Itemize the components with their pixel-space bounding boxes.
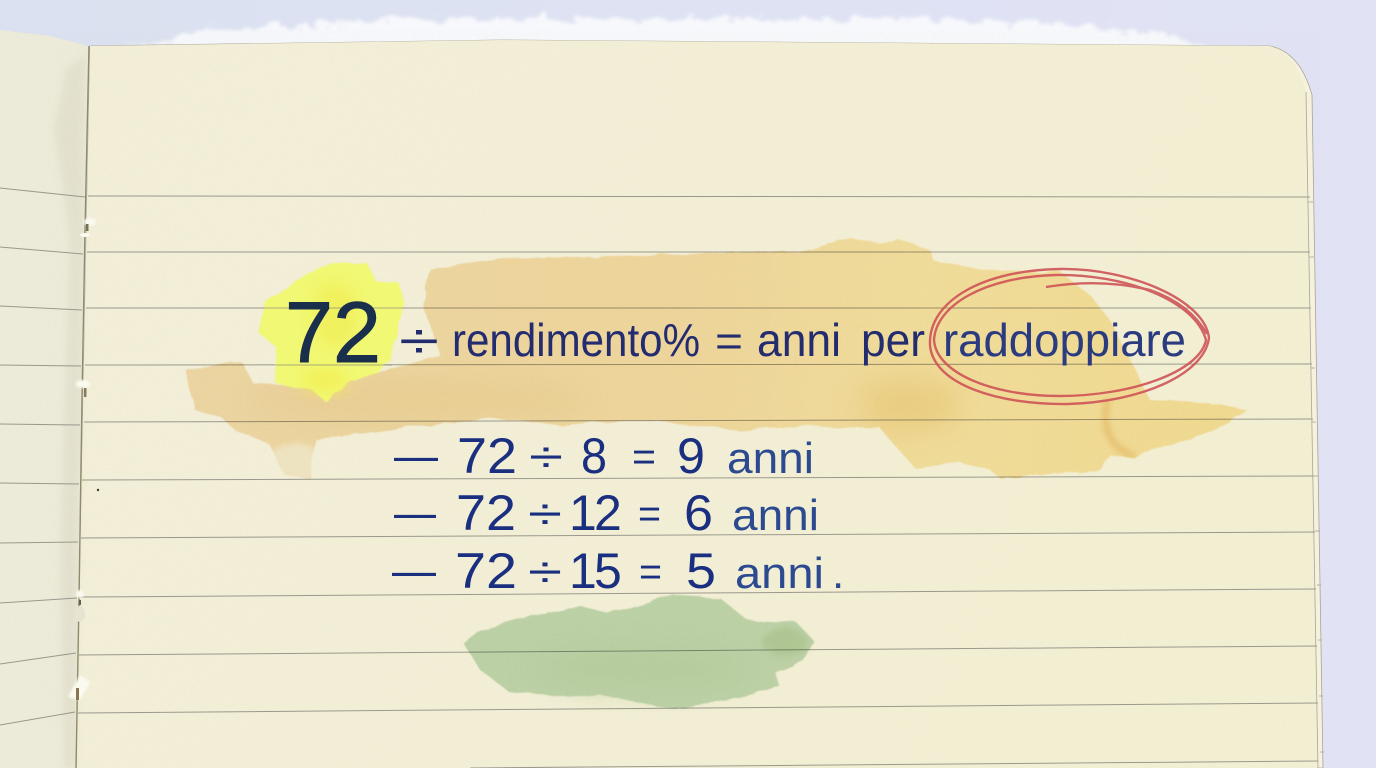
- watercolor: orange wash: [186, 238, 1245, 482]
- division sign: ÷: [399, 313, 439, 369]
- example: 72 / 15: =: [639, 550, 662, 594]
- page edge ticks: [1306, 92, 1324, 768]
- example: 72 / 8: 9: [677, 428, 705, 484]
- example: 72 / 12: [394, 485, 819, 541]
- rule lines: left page: [0, 188, 85, 725]
- spine fold: [76, 46, 89, 768]
- word: rendimento%: rendimento%: [452, 314, 700, 366]
- glare on desk: [130, 18, 1215, 50]
- example: 72 / 15: .: [832, 549, 844, 598]
- rule lines: right page: [78, 196, 1318, 768]
- example: 72 / 15: 72: [455, 543, 517, 599]
- example: 72 / 15: [392, 543, 844, 599]
- example: 72 / 8: 8: [581, 428, 607, 484]
- example: 72 / 15: anni: [735, 549, 824, 598]
- red circle around raddoppiare: [930, 269, 1209, 404]
- example: 72 / 15: ÷: [528, 548, 562, 597]
- word: per: per: [861, 314, 925, 366]
- ink speck: [97, 489, 99, 491]
- stitch: fourth: [68, 675, 90, 700]
- example: 72 / 8: 72: [457, 428, 517, 484]
- number 72: 72: [285, 285, 381, 381]
- example: 72 / 12: anni: [732, 491, 819, 540]
- example: 72 / 12: 72: [456, 485, 516, 541]
- example: 72 / 12: ÷: [528, 490, 562, 539]
- example: 72 / 12: =: [638, 492, 661, 536]
- example: 72 / 12: 12: [569, 485, 622, 541]
- formula: [285, 285, 1186, 381]
- example: 72 / 8: [394, 428, 814, 484]
- stitch: third: [75, 590, 85, 622]
- example: 72 / 8: ÷: [529, 433, 563, 482]
- left page shadow: [54, 54, 86, 768]
- word: raddoppiare: raddoppiare: [943, 314, 1186, 366]
- example: 72 / 8: —: [394, 429, 438, 481]
- watercolor: green wash: [463, 595, 813, 708]
- stitch: second: [76, 380, 90, 397]
- word: anni: anni: [757, 314, 841, 366]
- rule lines over highlight: [262, 308, 405, 365]
- example: 72 / 12: —: [394, 486, 436, 538]
- example: 72 / 12: 6: [684, 485, 713, 541]
- example: 72 / 15: 5: [686, 543, 716, 599]
- example: 72 / 8: anni: [727, 434, 814, 483]
- stitch: first: [80, 218, 96, 237]
- list of examples: [392, 428, 844, 599]
- example: 72 / 15: —: [392, 544, 436, 596]
- panel: left page: [0, 30, 88, 768]
- equals sign: =: [715, 317, 743, 366]
- example: 72 / 8: =: [632, 435, 656, 479]
- watercolor: yellow highlight: [259, 262, 405, 402]
- example: 72 / 15: 15: [569, 543, 622, 599]
